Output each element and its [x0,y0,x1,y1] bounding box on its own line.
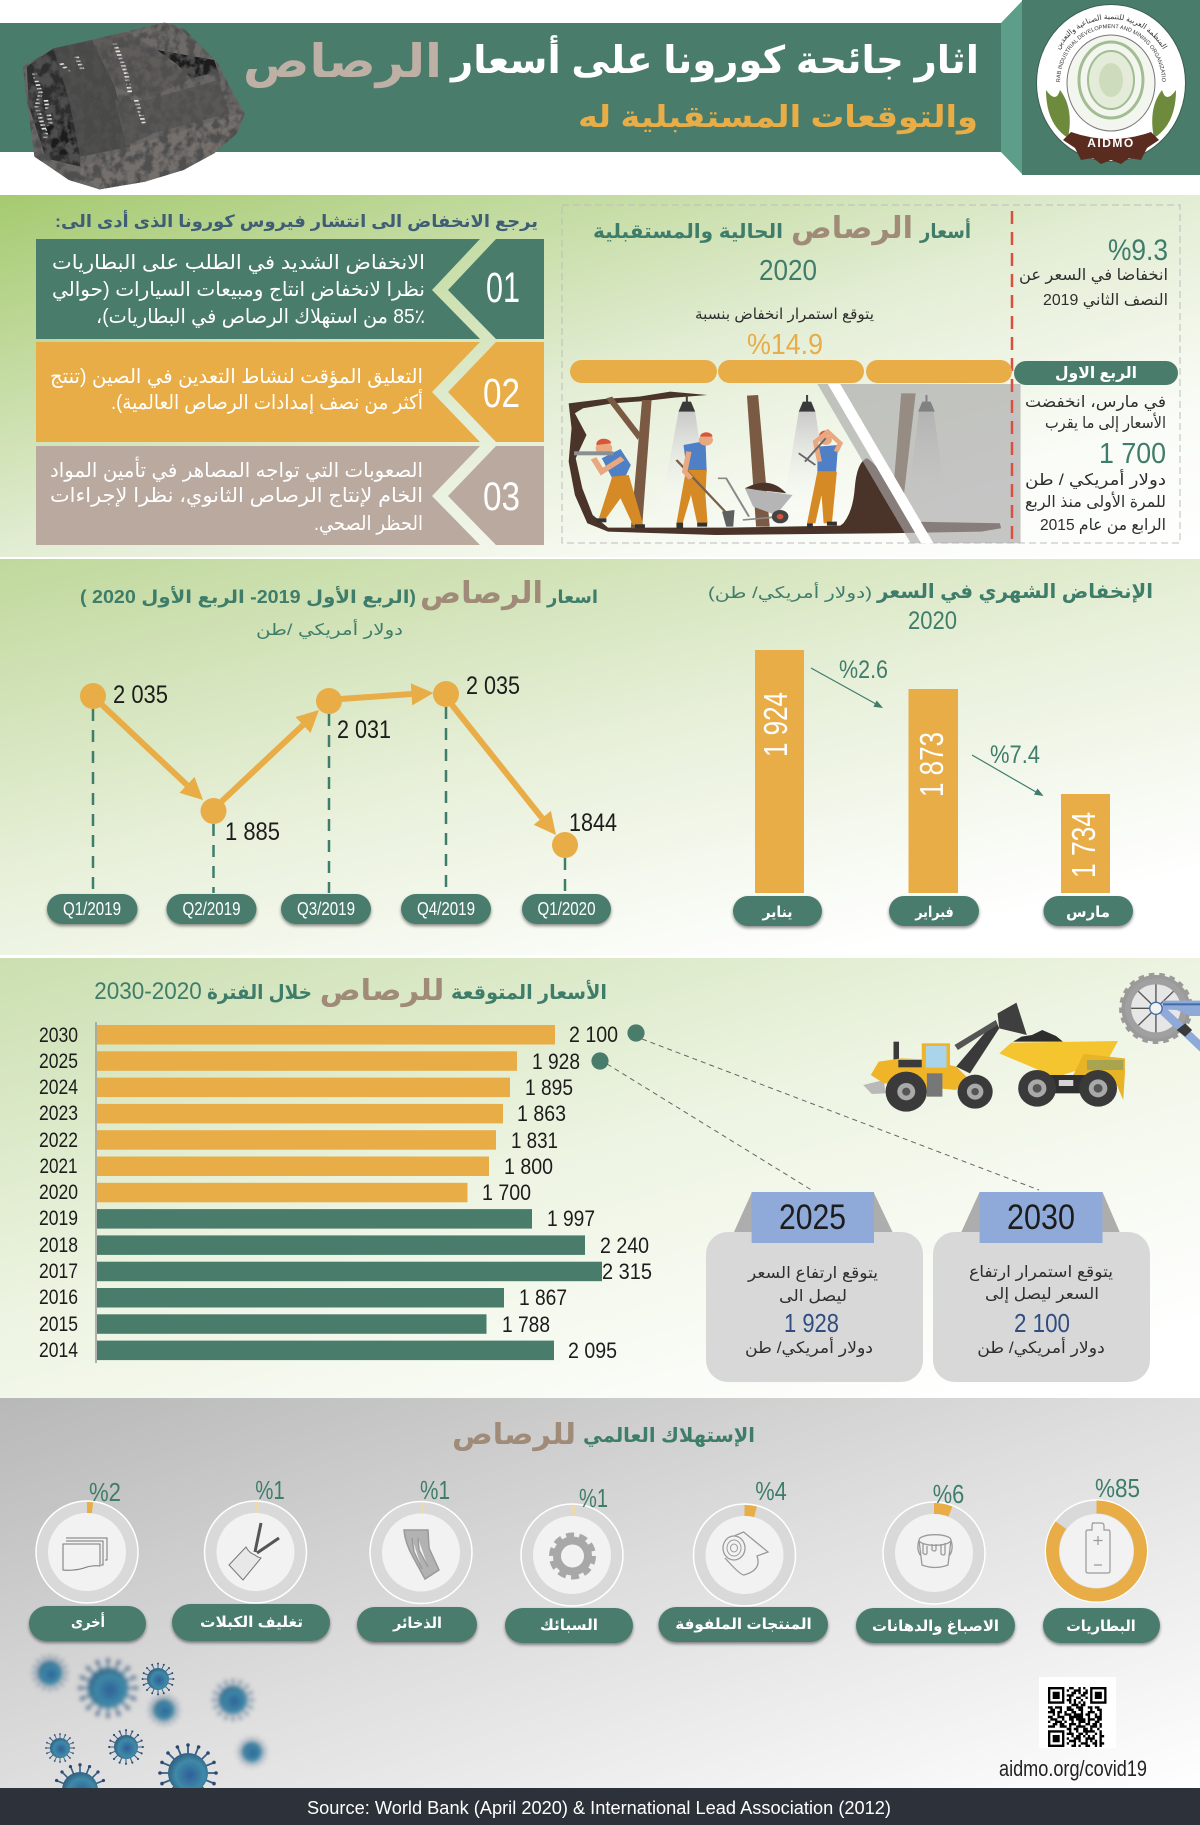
quarter pills: Q1/2019 [63,899,121,919]
data labels [113,672,617,846]
donut: other: أخرى [71,1612,105,1631]
heading: monthly decline: 2020 [908,607,957,635]
value labels: 1 831 [511,1128,558,1153]
year labels: 2024 [39,1076,78,1099]
stat: 1700 dollars: للمرة الأولى منذ الربع [1025,491,1166,512]
cause 01: نظرا لانخفاض انتاج ومبيعات السيارات (حوالي [52,279,425,302]
donut: ammunition [357,1475,477,1642]
year labels: 2018 [39,1234,78,1257]
chart: quarterly line chart [47,577,617,924]
donut: other: %2 [89,1477,121,1507]
forecast bars [97,1025,555,1202]
donut: alloys [505,1483,633,1643]
year 2020: 2020 [759,255,817,287]
forecast percent: %14.9 [747,329,823,361]
stat: 9.3 percent: %9.3 [1108,234,1168,267]
subtitle: والتوقعات المستقبلية له [578,101,978,135]
card: forecast 2025: 1 928 [784,1308,839,1338]
icon: AIDMO logo [1036,4,1186,164]
value labels: 1 997 [547,1206,595,1231]
month pills: فبراير [914,904,954,921]
donut: paints: %6 [933,1479,964,1509]
footer source bar [0,1788,1200,1825]
cause 01: 01 [486,264,520,312]
dump truck [999,1030,1125,1107]
bar values: 1 873 [913,732,950,797]
data labels: 2 035 [113,681,168,709]
stat: 9.3 percent [1019,234,1168,310]
footer source bar: Source: World Bank (April 2020) & International Lead Association (2012) [307,1798,891,1818]
heading: lead prices: الحالية والمستقبلية [593,221,783,243]
heading: monthly decline: الإنخفاض الشهري في السعر [876,581,1153,604]
year labels: 2019 [39,1207,78,1230]
donut: batteries [1043,1473,1160,1643]
stat: 9.3 percent: انخفاضا في السعر عن [1019,267,1168,285]
heading: quarterly prices [80,577,598,640]
panel: causes and current prices background [0,195,1200,557]
donut: ammunition: الذخائر [392,1615,442,1632]
bar values: 1 734 [1065,812,1102,878]
main title: الرصاص [243,35,442,88]
panel: global consumption background [0,1398,1200,1790]
icon: AIDMO logo: المنظمة العربية للتنمية الصناعية والتعدين [1058,14,1168,50]
first quarter pill [1014,361,1178,385]
heading: monthly decline: (دولار أمريكي/ طن) [708,582,872,603]
cause 01: الانخفاض الشديد في الطلب على البطاريات [52,252,425,275]
year labels: 2030 [39,1024,78,1047]
header logo block [1022,0,1200,175]
year labels: 2017 [39,1260,78,1283]
cause 01: 85٪ من استهلاك الرصاص في البطاريات)، [96,306,425,329]
heading: quarterly prices: (الربع الأول 2019- الربع الأول 2020 ) [80,586,416,608]
stat: 1700 dollars: دولار أمريكي / طن [1025,469,1166,490]
panel: forecast background [0,958,1200,1398]
donut: cable sheathing: %1 [255,1475,285,1505]
stat: 1700 dollars [1025,394,1166,535]
main title [243,35,979,88]
donut: alloys: السبائك [540,1617,598,1634]
month pills: مارس [1066,904,1110,921]
value labels: 1 788 [502,1312,550,1337]
donut: batteries: البطاريات [1066,1618,1136,1635]
heading: global consumption: الإستهلاك العالمي [583,1425,755,1448]
icon: lead ore lump [23,23,245,189]
donut: paints: الاصباغ والدهانات [872,1618,999,1635]
value labels: 1 800 [504,1154,553,1179]
heading: expected prices: للرصاص [320,975,444,1007]
bar values: 1 924 [757,692,794,757]
value labels: 2 095 [568,1338,617,1363]
panel: charts background [0,559,1200,955]
year labels: 2015 [39,1313,78,1336]
card: forecast 2025: 2025 [779,1198,846,1237]
donut: cable sheathing [172,1475,330,1641]
illustration: coronavirus particles [33,1656,266,1815]
heading: quarterly prices: اسعار [546,587,598,607]
donut: rolled products: المنتجات الملفوفة [675,1616,812,1633]
year labels: 2023 [39,1102,78,1125]
value labels: 1 867 [519,1285,567,1310]
first quarter pill: الربع الاول [1055,365,1137,382]
icon: AIDMO logo: AIDMO [1087,136,1135,150]
decline arrow 1: %2.6 [839,656,888,684]
stat: 1700 dollars: الرابع من عام 2015 [1040,517,1166,535]
month pills [733,896,1133,926]
callout dots and leaders [591,1024,1039,1190]
card: forecast 2025: دولار أمريكي/ طن [745,1337,873,1358]
heading: expected prices: 2030-2020 [94,978,202,1005]
heading: lead prices: أسعار [919,217,971,243]
year labels: 2016 [39,1286,78,1309]
illustration: loader and dump truck [863,975,1200,1112]
cause 03: الصعوبات التي تواجه المصاهر في تأمين المواد [50,456,423,483]
illustration: miners [569,384,1021,543]
stat: 1700 dollars: الأسعار إلى ما يقرب [1045,412,1166,433]
donut: ammunition: %1 [420,1475,450,1505]
website link: aidmo.org/covid19 [999,1756,1147,1781]
stat: 9.3 percent: النصف الثاني 2019 [1043,292,1168,310]
heading: expected prices: الأسعار المتوقعة [451,979,607,1004]
header band [0,23,1002,152]
value labels: 2 315 [602,1259,652,1284]
card: forecast 2025 [706,1192,923,1382]
heading: quarterly prices: الرصاص [420,577,543,610]
donut: rolled products: %4 [755,1476,787,1506]
heading: lead prices: الرصاص [791,212,913,245]
year labels: 2025 [39,1050,78,1073]
decline arrow 1 [811,656,888,708]
year labels: 2022 [39,1129,78,1152]
cause 02: 02 [483,370,520,416]
worker 2 [684,441,707,472]
data labels: 1 885 [225,818,280,846]
chart: monthly bar chart [708,581,1153,926]
main title: اثار جائحة كورونا على أسعار [449,35,979,83]
value labels: 1 863 [517,1101,566,1126]
month pills: يناير [762,904,792,921]
value labels: 1 928 [532,1049,580,1074]
card: forecast 2030: السعر ليصل إلى [985,1286,1099,1304]
worker 1 [602,449,631,478]
quarter segments bar [570,360,1012,383]
card: forecast 2030: 2 100 [1014,1308,1070,1338]
stat: 1700 dollars: في مارس، انخفضت [1025,394,1166,412]
value labels [482,1022,652,1363]
arrows between points [100,683,556,835]
cause 01 [36,239,544,339]
heading: expected prices: خلال الفترة [207,982,312,1004]
donut: cable sheathing: تغليف الكبلات [200,1614,303,1631]
donut: batteries: %85 [1095,1473,1140,1503]
card: forecast 2025: ليصل الى [779,1288,847,1305]
data labels: 2 031 [337,716,391,744]
decline arrow 2 [972,741,1044,796]
heading: expected prices [94,975,607,1007]
quarter pills: Q3/2019 [297,899,355,919]
donut: other [29,1477,146,1641]
cause 02: أكثر من نصف إمدادات الرصاص العالمية). [111,389,423,415]
donut: rolled products [658,1476,828,1642]
header side fold [1001,0,1023,175]
card: forecast 2030: 2030 [1007,1198,1075,1237]
cause 03: الخام لإنتاج الرصاص الثانوي، نظرا لإجراءات [50,485,423,508]
donut: alloys: %1 [579,1483,608,1513]
quarter pills: Q4/2019 [417,899,475,919]
value labels: 1 700 [482,1180,531,1205]
year labels: 2014 [39,1339,78,1362]
value labels: 1 895 [525,1075,573,1100]
diagonal overlay [828,384,934,543]
card: forecast 2025: يتوقع ارتفاع السعر [747,1265,878,1283]
historical bars [97,1209,602,1360]
card: forecast 2030: دولار أمريكي/ طن [977,1337,1105,1358]
quarter pills [47,894,611,924]
bar values [757,692,1102,878]
QR code [1039,1677,1116,1748]
year labels: 2020 [39,1181,78,1204]
heading: global consumption: للرصاص [452,1419,576,1451]
quarter pills: Q2/2019 [182,899,240,919]
panel: causes of the decline [36,210,544,545]
decline arrow 2: %7.4 [990,741,1040,769]
year labels: 2021 [40,1155,78,1178]
card: forecast 2030: يتوقع استمرار ارتفاع [969,1264,1113,1282]
worker 3 [817,445,838,472]
cause 03 [36,446,544,545]
quarter pills: Q1/2020 [538,899,596,919]
cause 03: الحظر الصحي. [314,513,423,536]
header banner [0,0,1200,190]
year labels [39,1024,78,1362]
data points [80,681,578,858]
panel: current and future prices [562,205,1180,543]
value labels: 2 100 [569,1022,618,1047]
data labels: 1844 [569,809,617,837]
bars [755,650,1110,893]
heading: causes: يرجع الانخفاض الى انتشار فيروس كورونا الذى أدى الى: [55,210,538,232]
red dashed divider [1011,211,1013,543]
donut: paints [856,1479,1015,1643]
data labels: 2 035 [466,672,520,700]
heading: quarterly prices: دولار أمريكي /طن [256,619,403,640]
stat: 1700 dollars: 1 700 [1099,438,1166,470]
cause 02 [36,342,544,442]
loader [863,1003,1027,1112]
card: forecast 2030 [933,1192,1150,1382]
forecast text: يتوقع استمرار انخفاض بنسبة [695,306,874,323]
cause 02: التعليق المؤقت لنشاط التعدين في الصين (تنتج [50,366,423,389]
heading: global consumption [452,1419,755,1451]
heading: monthly decline [708,581,1153,635]
wheelbarrow [745,488,793,515]
heading: lead prices [593,212,971,245]
bucket wheel [1121,975,1200,1052]
value labels: 2 240 [600,1233,649,1258]
chart: expected prices 2014-2030 [39,975,1039,1363]
cause 03: 03 [483,475,520,519]
